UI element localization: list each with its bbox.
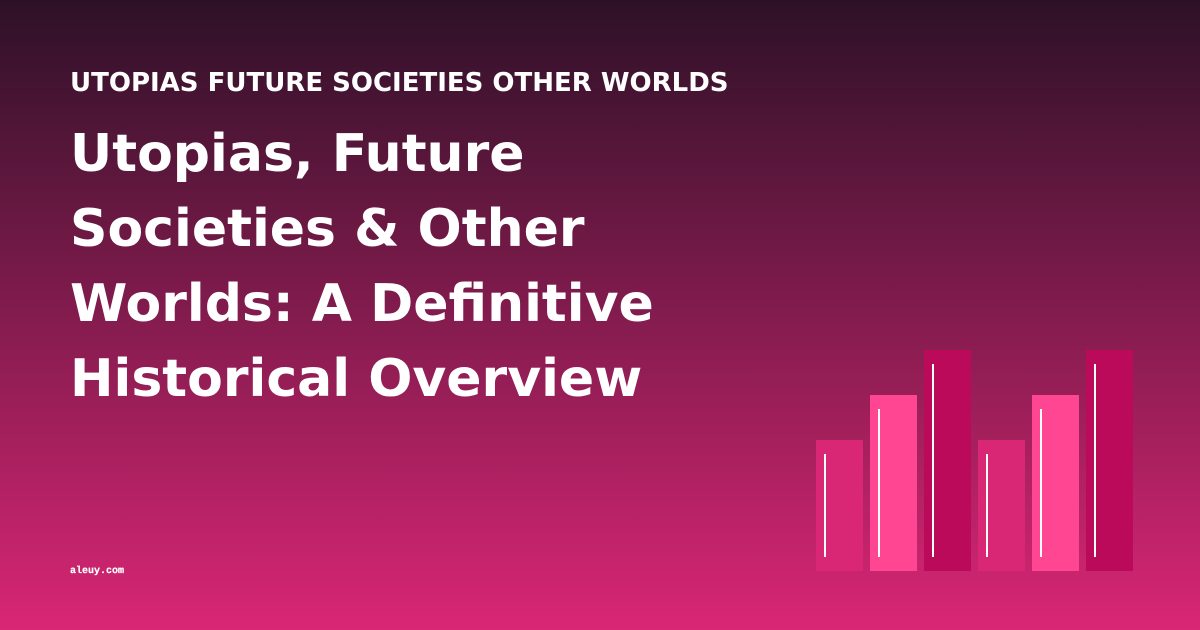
- title: Societies & Other: [70, 199, 585, 259]
- title: Historical Overview: [70, 349, 642, 409]
- eyebrow heading: UTOPIAS FUTURE SOCIETIES OTHER WORLDS: [70, 68, 729, 98]
- bar 5: [1032, 395, 1079, 571]
- title: Utopias, Future: [70, 124, 524, 184]
- title: [70, 124, 654, 409]
- bar 2: [870, 395, 917, 571]
- bar 1: [816, 440, 863, 571]
- title: Worlds: A Definitive: [70, 274, 654, 334]
- bar 4: [978, 440, 1025, 571]
- bar 6: [1086, 350, 1133, 571]
- bar 3: [924, 350, 971, 571]
- footer site name: aleuy.com: [70, 566, 124, 577]
- bar chart decoration: [816, 350, 1133, 571]
